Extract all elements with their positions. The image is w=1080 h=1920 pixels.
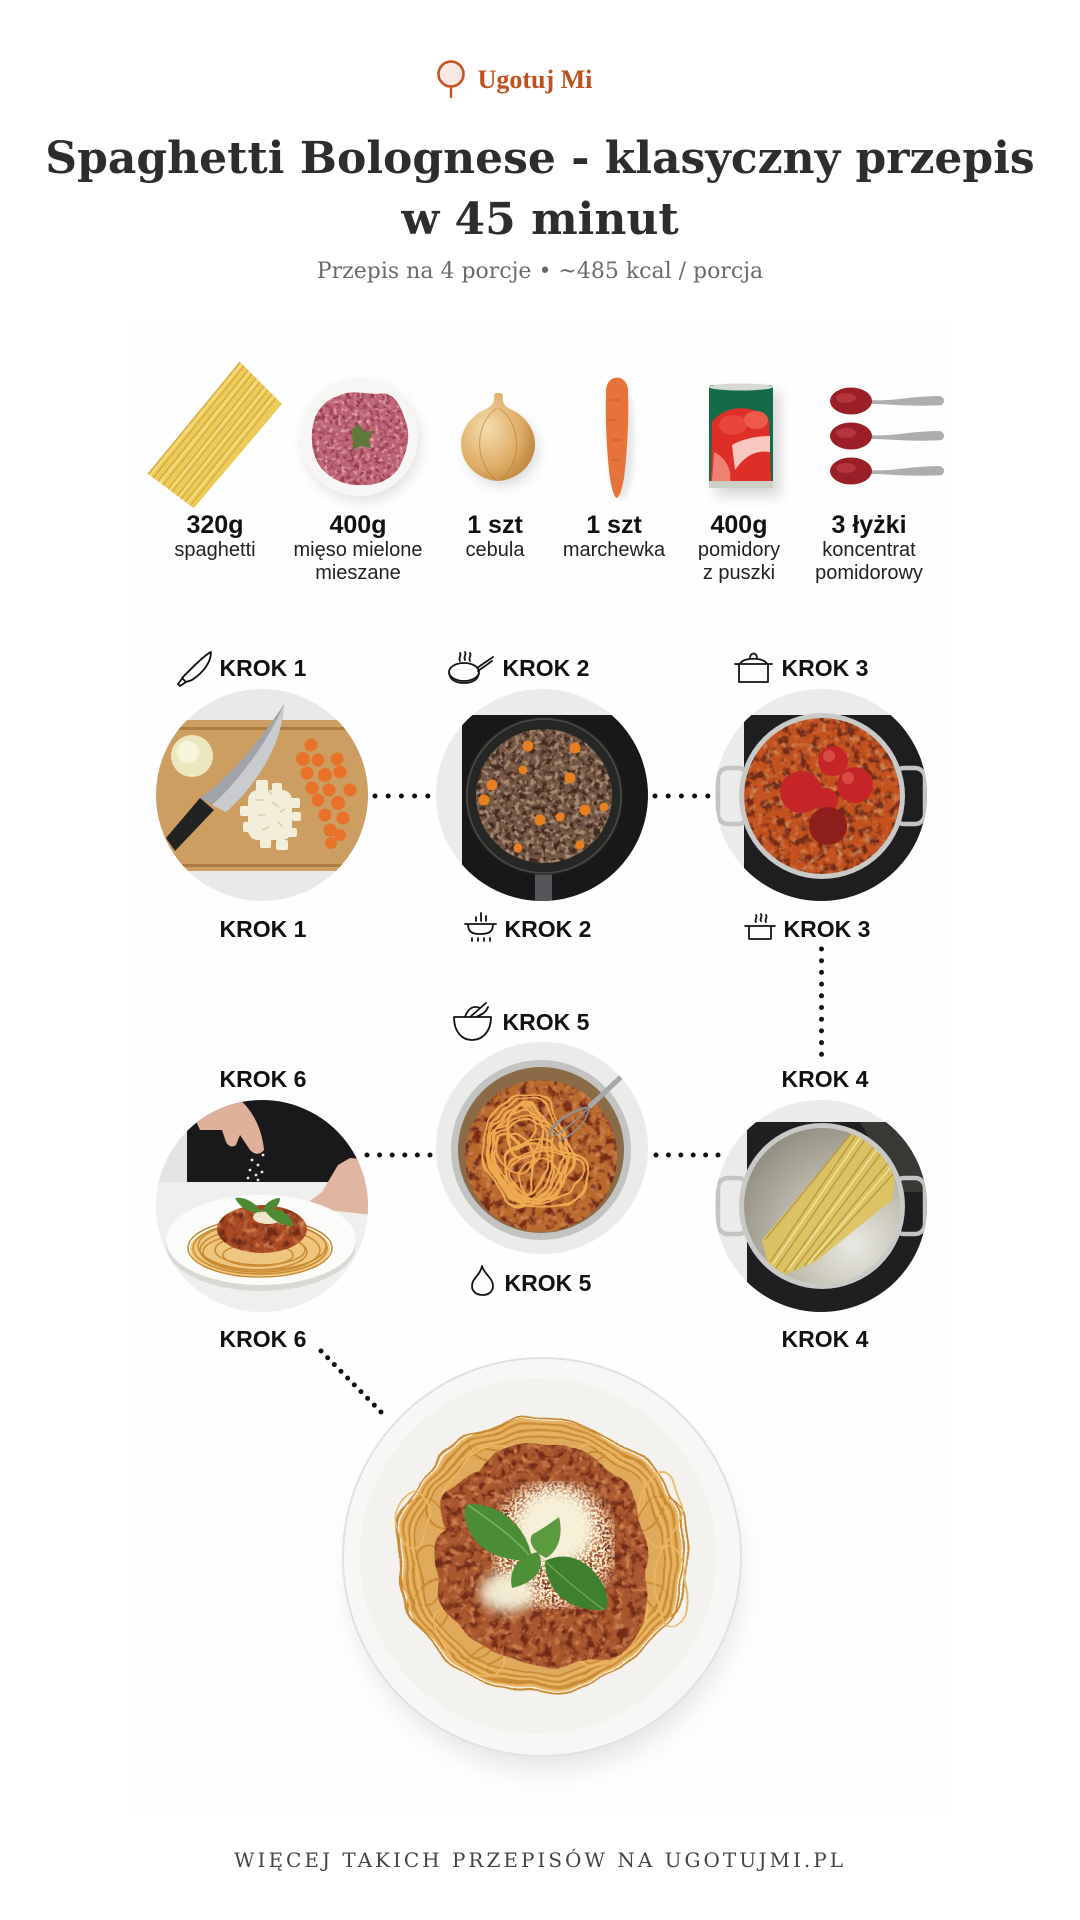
grated parmesan: [480, 1481, 615, 1612]
ingredient: onion: [461, 393, 538, 486]
connector dots: step 3 to 4: [819, 949, 824, 1056]
ingredient labels: 320g: [187, 511, 243, 539]
ingredient labels: 400g: [711, 511, 767, 539]
connector dots: step 4 to 5: [656, 1152, 719, 1158]
icon: knife: [178, 652, 211, 686]
connector dots: step 6 to final dish: [321, 1351, 381, 1412]
step 4 photo: boiling pasta: [715, 1100, 927, 1312]
icon: flame: [472, 1266, 493, 1295]
basil leaves: [465, 1504, 608, 1610]
connector dots: step 1 to 2: [375, 794, 428, 798]
step 6 bottom label: KROK 6: [220, 1326, 306, 1352]
ingredient labels: marchewka: [563, 539, 666, 561]
icon: steaming pot: [745, 914, 775, 939]
bolognese sauce: [435, 1443, 647, 1666]
step 1: [150, 652, 375, 942]
step 5 top label: KROK 5: [503, 1009, 590, 1035]
step 3: [710, 654, 936, 942]
logo: Ugotuj Mi: [438, 62, 592, 97]
title: w 45 minut: [400, 194, 679, 245]
ingredient labels: 3 łyżki: [831, 511, 907, 539]
step 1 top label: KROK 1: [220, 655, 307, 681]
ingredient: spaghetti: [148, 362, 282, 508]
ingredient: minced meat bowl: [300, 378, 421, 502]
connector dots: step 2 to 3: [655, 794, 708, 798]
ingredient: canned tomatoes: [709, 384, 780, 496]
step 4: [715, 1071, 927, 1347]
step 1 photo: cutting board: [150, 685, 375, 905]
icon: bowl and whisk: [454, 1003, 491, 1040]
ingredient labels: spaghetti: [174, 539, 256, 561]
step 5 photo: mixing pasta with sauce: [430, 1038, 655, 1258]
ingredient labels: mięso mielone: [294, 539, 422, 561]
subtitle: Przepis na 4 porcje • ~485 kcal / porcja: [317, 259, 763, 284]
step 6 top label: KROK 6: [220, 1066, 306, 1092]
plate: [342, 1357, 742, 1768]
icon: frying pan: [449, 652, 493, 683]
step 6: [150, 1066, 375, 1352]
ingredient labels: 1 szt: [467, 511, 523, 539]
ingredient labels: cebula: [466, 539, 525, 561]
ingredient labels: [174, 511, 923, 584]
ingredient labels: 1 szt: [586, 511, 642, 539]
ingredient labels: koncentrat: [822, 539, 916, 561]
ingredient labels: 400g: [330, 511, 386, 539]
step 2 bottom label: KROK 2: [505, 916, 591, 942]
connector dots: step 5 to 6: [367, 1152, 431, 1158]
icon: logo spoon: [438, 62, 464, 97]
step 2: [430, 652, 655, 942]
ingredient labels: z puszki: [703, 562, 775, 584]
step 6 photo: plating with cheese: [156, 1100, 368, 1312]
final dish: spaghetti bolognese: [342, 1357, 742, 1768]
step 5 bottom label: KROK 5: [505, 1270, 592, 1296]
step 4 top label: KROK 4: [782, 1066, 869, 1092]
ingredient: tomato paste spoons: [830, 388, 944, 484]
icon: burner: [465, 913, 496, 941]
step 3 photo: tomato sauce pot: [710, 685, 936, 905]
logo wordmark: Ugotuj Mi: [478, 65, 592, 94]
icon: pot: [735, 654, 772, 682]
ingredient labels: mieszane: [315, 562, 401, 584]
step 4 bottom label: KROK 4: [782, 1326, 869, 1352]
step 3 bottom label: KROK 3: [784, 916, 870, 942]
title: Spaghetti Bolognese - klasyczny przepis: [45, 133, 1035, 184]
step 3 top label: KROK 3: [782, 655, 868, 681]
panel: ingredients: [148, 362, 944, 584]
step 1 bottom label: KROK 1: [220, 916, 307, 942]
pasta: [397, 1418, 688, 1692]
step 2 top label: KROK 2: [503, 655, 589, 681]
ingredient labels: pomidorowy: [815, 562, 923, 584]
step 2 photo: frying mince: [430, 685, 655, 905]
step 5: [430, 1003, 655, 1296]
ingredient labels: pomidory: [698, 539, 780, 561]
ingredient: carrot: [606, 378, 634, 500]
footer call to action: WIĘCEJ TAKICH PRZEPISÓW NA UGOTUJMI.PL: [234, 1847, 846, 1872]
